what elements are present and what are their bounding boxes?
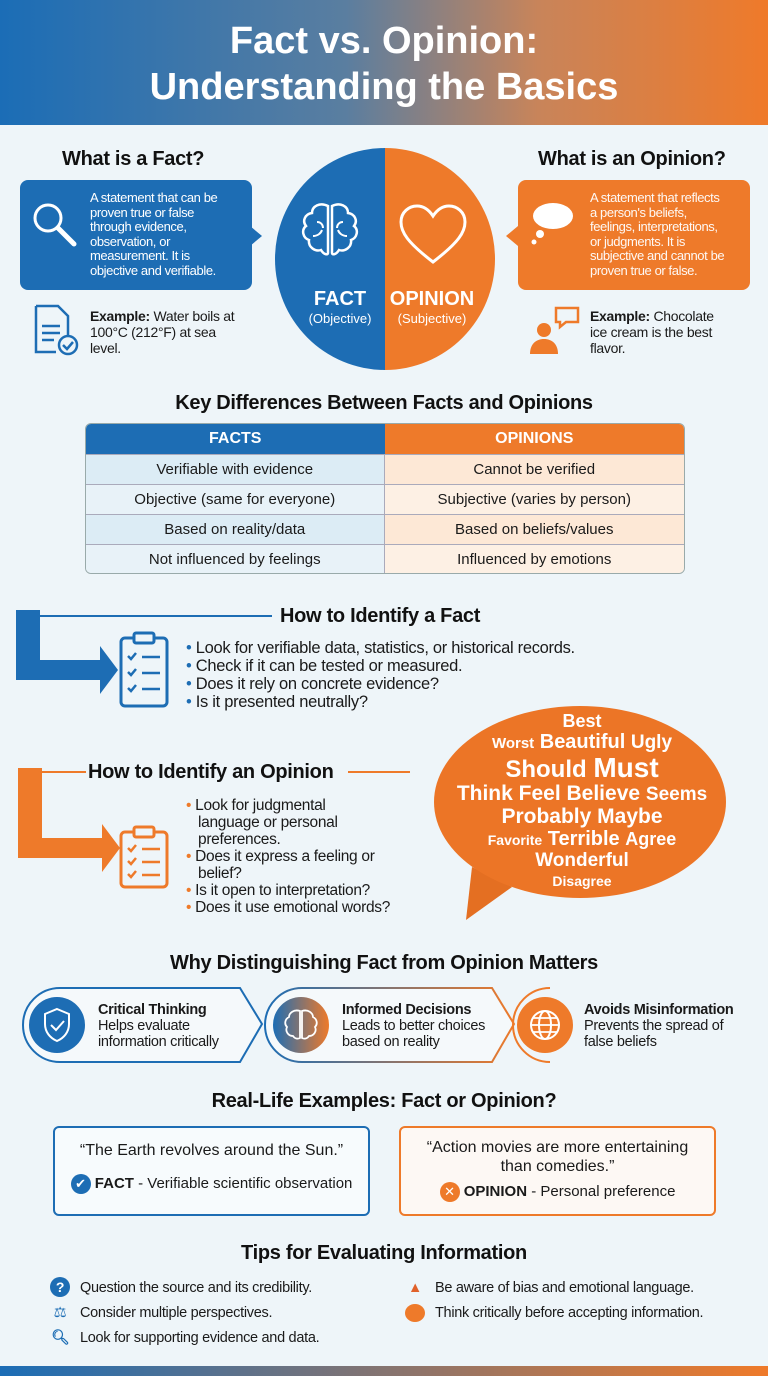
text: fact definition: observation, or: [90, 234, 170, 249]
panel: fact example: “The Earth revolves around the Sun.”: [80, 1142, 343, 1159]
text: fact example: Example: Water boils at: [90, 308, 234, 324]
speech bubble: opinion words: Favorite Terrible Agree: [488, 828, 676, 850]
list: identify opinion: language or personal: [198, 814, 338, 831]
badge: fact: FACT - Verifiable scientific observation: [95, 1175, 352, 1192]
text: opinion example: flavor.: [590, 340, 625, 356]
icon: heart: [400, 204, 466, 264]
title: [150, 20, 618, 108]
table: differences: Verifiable with evidence: [156, 461, 313, 478]
list: tips left: ?: [56, 1279, 64, 1295]
list: identify opinion: [186, 797, 390, 916]
list: tips right: Be aware of bias and emotional language.: [435, 1280, 694, 1296]
panel: avoids misinformation: Avoids Misinformation: [584, 1002, 733, 1018]
label: fact: FACT: [314, 288, 366, 310]
text: opinion definition: [590, 190, 724, 278]
list: tips left: Question the source and its credibility.: [80, 1280, 312, 1296]
list: tips left: ⚖: [54, 1305, 66, 1321]
text: fact example: 100°C (212°F) at sea: [90, 324, 216, 340]
text: opinion definition: proven true or false.: [590, 263, 697, 278]
list: tips right: ▲: [408, 1280, 422, 1296]
speech bubble: opinion words: Best: [562, 711, 602, 731]
label: fact: (Objective): [309, 311, 371, 326]
table: differences: Based on reality/data: [164, 521, 305, 538]
icon: shield: [29, 997, 85, 1053]
list: identify opinion: • Is it open to interpretation?: [186, 882, 370, 899]
list: identify fact: • Look for verifiable data, statistics, or historical records.: [186, 639, 575, 657]
arrow: opinion L-arrow: [18, 768, 410, 872]
speech bubble: opinion words: Disagree: [552, 873, 612, 889]
panel: fact definition: [20, 180, 252, 290]
panel: critical thinking: [22, 987, 264, 1063]
title: Understanding the Basics: [150, 66, 618, 108]
list: identify fact: [186, 639, 575, 711]
text: fact definition: [90, 190, 218, 278]
icon: brain circle: [273, 997, 329, 1053]
heading: real-life examples: Real-Life Examples: Fact or Opinion?: [212, 1090, 556, 1112]
heading: what is an opinion: What is an Opinion?: [538, 148, 726, 170]
title: Fact vs. Opinion:: [230, 20, 538, 62]
panel: fact example: [53, 1126, 370, 1216]
panel: avoids misinformation: [512, 987, 733, 1063]
heading: what is a fact: What is a Fact?: [62, 148, 204, 170]
text: opinion example: [590, 308, 714, 356]
table: differences: [85, 423, 685, 574]
text: fact example: [90, 308, 235, 356]
icon: clipboard orange: [120, 826, 168, 888]
icon: document check: [34, 304, 78, 356]
label: opinion: OPINION: [390, 288, 474, 310]
list: identify opinion: • Does it express a feeling or: [186, 848, 375, 865]
bottom bar: [0, 1366, 768, 1376]
list: tips right: Think critically before accepting information.: [435, 1305, 703, 1321]
speech bubble: opinion words: Should Must: [505, 752, 659, 783]
list: tips left: Look for supporting evidence and data.: [80, 1330, 319, 1346]
text: opinion example: ice cream is the best: [590, 324, 712, 340]
table: differences: Based on beliefs/values: [455, 521, 613, 538]
label: opinion: [390, 288, 474, 326]
icon: globe: [517, 997, 573, 1053]
list: identify opinion: • Does it use emotional words?: [186, 899, 390, 916]
text: fact definition: measurement. It is: [90, 248, 190, 263]
speech bubble: opinion words: Think Feel Believe Seems: [457, 782, 707, 805]
table: differences: Cannot be verified: [473, 461, 595, 478]
panel: opinion definition: [518, 180, 750, 290]
label: opinion: (Subjective): [398, 311, 466, 326]
text: fact definition: through evidence,: [90, 219, 187, 234]
heading: tips: Tips for Evaluating Information: [241, 1242, 527, 1264]
panel: opinion example: [399, 1126, 716, 1216]
heading: identify fact: How to Identify a Fact: [280, 605, 480, 627]
panel: informed decisions: [264, 987, 516, 1063]
table: differences: FACTS: [209, 430, 261, 447]
badge: opinion: OPINION - Personal preference: [464, 1183, 675, 1200]
list: identify fact: • Does it rely on concrete evidence?: [186, 675, 439, 693]
table: differences: Not influenced by feelings: [149, 551, 321, 568]
list: tips right: [405, 1280, 703, 1322]
text: opinion definition: subjective and cannot be: [590, 248, 724, 263]
speech bubble: opinion words: Probably Maybe: [501, 805, 663, 828]
text: opinion definition: or judgments. It is: [590, 234, 685, 249]
icon: magnifier: [34, 204, 76, 246]
list: tips left: Consider multiple perspectives.: [80, 1305, 272, 1321]
text: fact definition: proven true or false: [90, 205, 194, 220]
table: differences: OPINIONS: [495, 430, 573, 447]
table: differences: Influenced by emotions: [457, 551, 611, 568]
label: fact: [309, 288, 371, 326]
icon: thought cloud: [532, 203, 573, 244]
list: tips left: 🔍︎: [51, 1330, 69, 1346]
panel: opinion example: than comedies.”: [501, 1158, 614, 1175]
icon: brain: [302, 203, 358, 256]
text: opinion definition: feelings, interpretations,: [590, 219, 718, 234]
heading: why it matters: Why Distinguishing Fact from Opinion Matters: [170, 952, 598, 974]
panel: informed decisions: Informed Decisions: [342, 1002, 471, 1018]
list: identify fact: • Check if it can be tested or measured.: [186, 657, 462, 675]
list: identify opinion: • Look for judgmental: [186, 797, 326, 814]
heading: identify opinion: How to Identify an Opinion: [88, 761, 334, 783]
heading: key differences: Key Differences Between Facts and Opinions: [175, 392, 593, 414]
panel: opinion example: “Action movies are more entertaining: [427, 1139, 688, 1156]
panel: avoids misinformation: false beliefs: [584, 1034, 657, 1050]
list: identify opinion: belief?: [198, 865, 242, 882]
panel: informed decisions: Leads to better choices based on reality: [342, 1018, 485, 1050]
table: differences: Objective (same for everyone): [134, 491, 335, 508]
circle: fact vs opinion: [275, 148, 495, 370]
list: tips left: [50, 1277, 319, 1346]
panel: avoids misinformation: Prevents the spread of: [584, 1018, 723, 1034]
badge: opinion: ✕: [444, 1184, 455, 1199]
panel: critical thinking: Helps evaluate information critically: [98, 1018, 219, 1050]
text: opinion definition: a person's beliefs,: [590, 205, 687, 220]
badge: fact: ✔: [75, 1176, 86, 1191]
icon: person speaking: [530, 306, 580, 354]
list: identify fact: • Is it presented neutrally?: [186, 693, 368, 711]
text: opinion example: Example: Chocolate: [590, 308, 714, 324]
text: fact definition: objective and verifiable.: [90, 263, 216, 278]
table: differences: Subjective (varies by person): [438, 491, 631, 508]
text: fact example: level.: [90, 340, 121, 356]
text: fact definition: A statement that can be: [90, 190, 217, 205]
list: identify opinion: preferences.: [198, 831, 281, 848]
panel: critical thinking: Critical Thinking: [98, 1002, 206, 1018]
text: opinion definition: A statement that reflects: [590, 190, 719, 205]
speech bubble: opinion words: Wonderful: [535, 850, 629, 871]
speech bubble: opinion words: [434, 706, 726, 920]
arrow: fact L-arrow: [16, 610, 272, 694]
speech bubble: opinion words: Worst Beautiful Ugly: [492, 731, 672, 753]
icon: clipboard blue: [120, 632, 168, 708]
header banner: [0, 0, 768, 125]
